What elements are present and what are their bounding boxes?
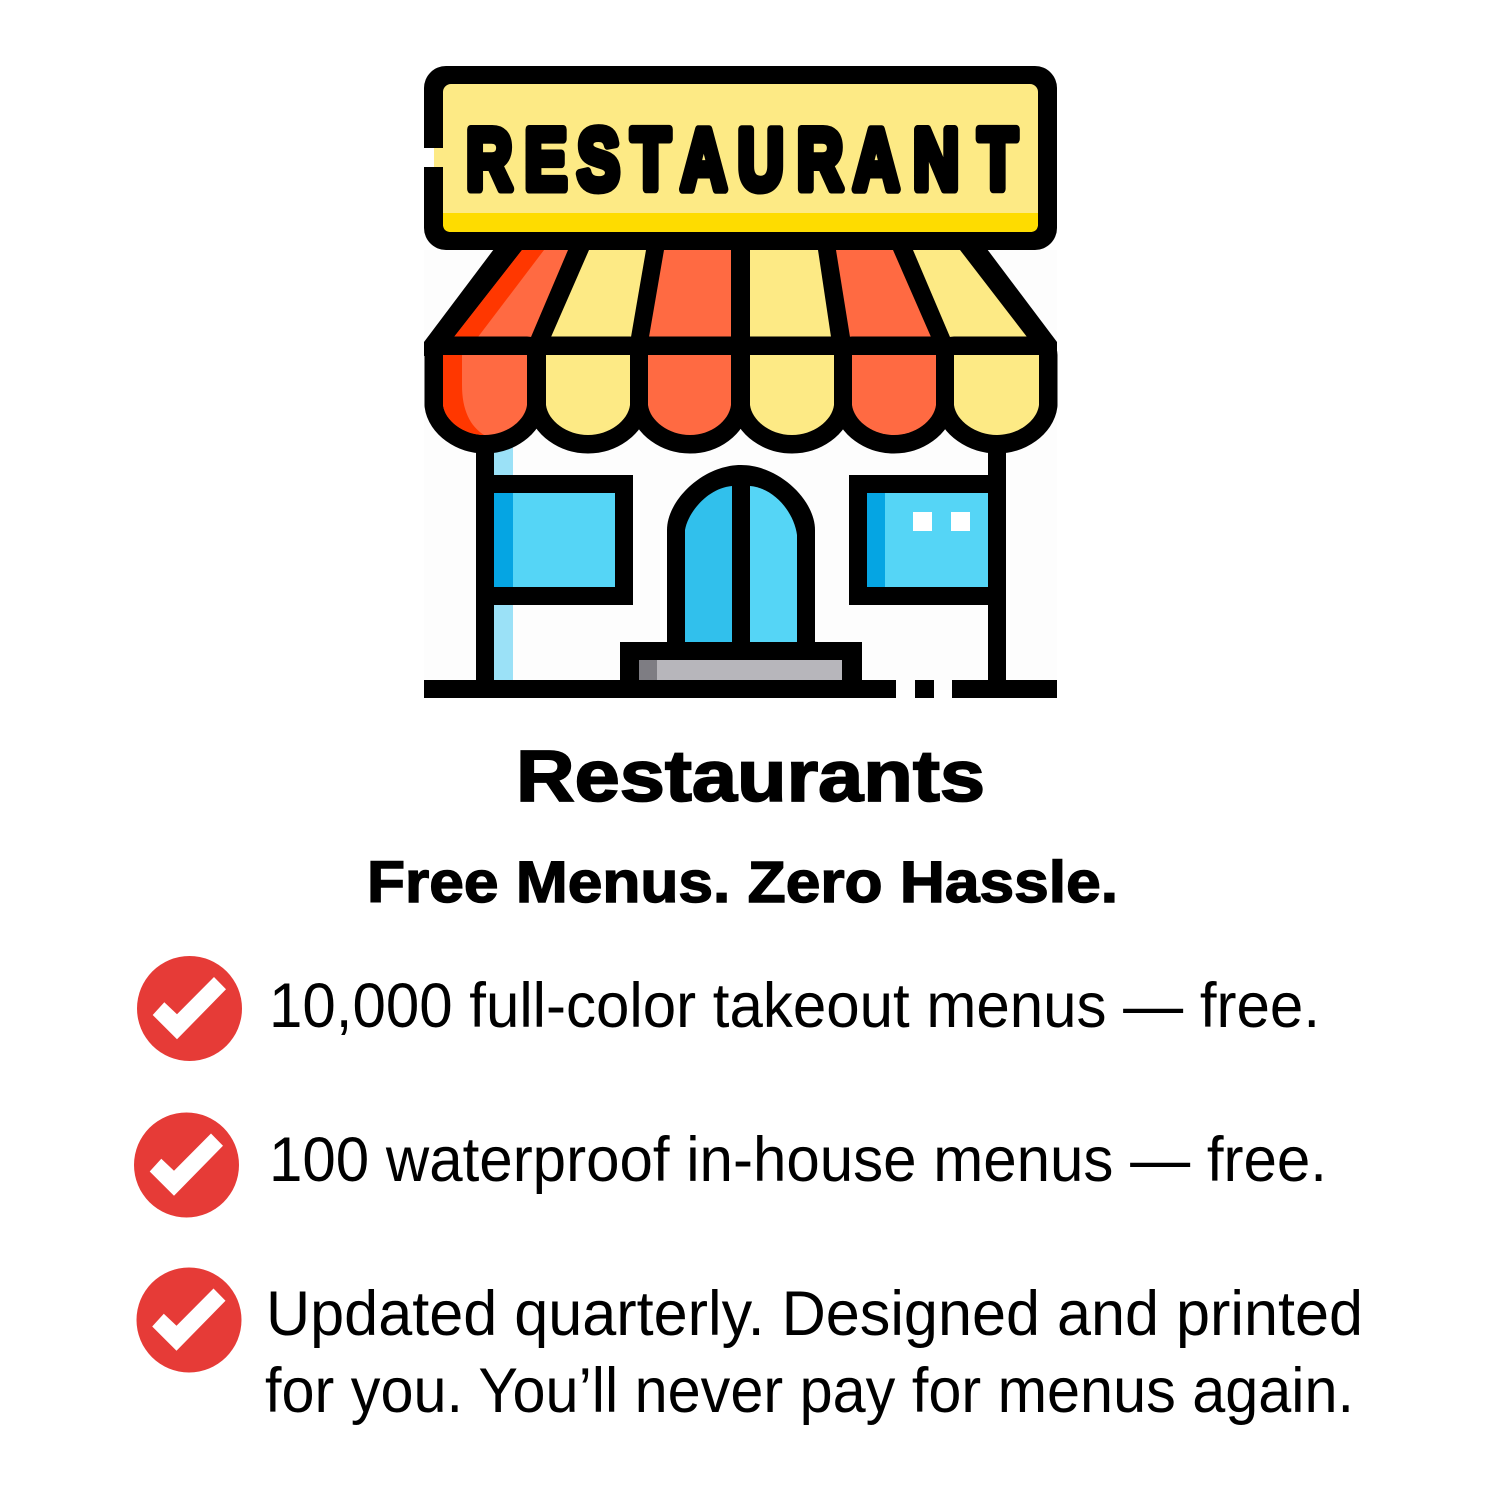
icon: restaurant storefront <box>424 66 1057 698</box>
icon: red check <box>134 1112 239 1218</box>
icon: right window <box>849 475 1006 605</box>
icon: left wall highlight <box>494 445 513 681</box>
list item: takeout menus <box>137 956 1320 1061</box>
icon: left pole <box>476 445 494 685</box>
heading: Restaurants <box>516 737 985 817</box>
subheading: Free Menus. Zero Hassle. <box>367 850 1118 915</box>
icon: door step <box>620 642 862 682</box>
icon: red check <box>137 956 242 1061</box>
icon: awning roof <box>424 245 1057 356</box>
text: takeout menus: 10,000 full-color takeout menus — free. <box>269 971 1320 1041</box>
icon: right pole <box>988 445 1006 685</box>
icon: ground line <box>424 680 1057 698</box>
list item: in-house menus <box>134 1112 1327 1218</box>
icon: left window <box>476 475 633 605</box>
text: updated quarterly: for you. You’ll never pay for menus again. <box>265 1356 1354 1426</box>
icon: restaurant sign <box>424 66 1057 250</box>
list item: updated quarterly <box>136 1268 1363 1426</box>
sign lettering: RESTAURANT <box>466 113 1017 208</box>
icon: red check <box>136 1268 242 1372</box>
text: updated quarterly <box>265 1279 1363 1426</box>
text: in-house menus: 100 waterproof in-house menus — free. <box>269 1125 1327 1195</box>
icon: awning scallops <box>443 355 1039 435</box>
text: updated quarterly: Updated quarterly. Designed and printed <box>266 1279 1363 1349</box>
storefront background <box>424 250 1057 690</box>
icon: door <box>667 465 815 645</box>
